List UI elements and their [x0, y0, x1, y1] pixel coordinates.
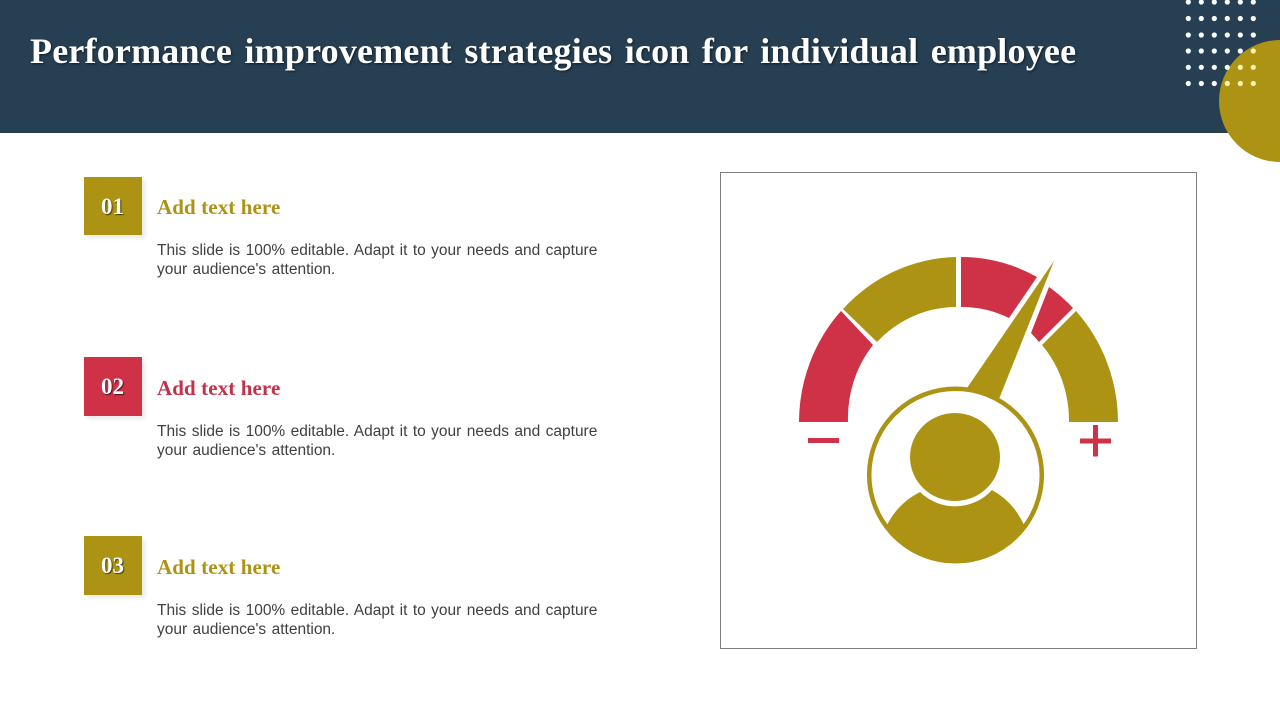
employee head: [910, 413, 1000, 501]
number badge 01: [84, 177, 142, 235]
item 01: [84, 177, 597, 278]
item 03: [84, 536, 597, 638]
gauge: right gold segment: [1042, 311, 1118, 422]
gauge: upper right red segment: [961, 257, 1037, 318]
number badge 03: [84, 536, 142, 595]
item 03 text: [157, 602, 597, 638]
gauge: small red segment: [1031, 287, 1073, 342]
decorative circle and dots: [1186, 0, 1280, 162]
gauge: left red segment: [799, 311, 873, 422]
number badge 03: 03: [101, 553, 124, 578]
item 02 heading: Add text here: [157, 376, 280, 400]
employee body: [887, 490, 1024, 559]
employee ring: [869, 389, 1042, 561]
icon: performance gauge with employee: [799, 257, 1118, 564]
number badge 01: 01: [101, 194, 124, 219]
item 02 text: [157, 423, 597, 459]
item 03 text: This slide is 100% editable. Adapt it to your needs and capture: [157, 602, 597, 619]
item 01 text: your audience's attention.: [157, 261, 335, 278]
item 02 text: your audience's attention.: [157, 442, 335, 459]
number badge 02: 02: [101, 374, 124, 399]
item 02: [84, 357, 597, 459]
item 03 heading: Add text here: [157, 555, 280, 579]
item 01 text: [157, 242, 597, 278]
gauge needle: [967, 261, 1054, 399]
item 02 text: This slide is 100% editable. Adapt it to your needs and capture: [157, 423, 597, 440]
item 03 text: your audience's attention.: [157, 621, 335, 638]
plus sign: [1080, 425, 1111, 456]
title: Performance improvement strategies icon for individual employee: [30, 31, 1076, 71]
item 01 text: This slide is 100% editable. Adapt it to your needs and capture: [157, 242, 597, 259]
gauge: upper left gold segment: [843, 257, 956, 342]
number badge 02: [84, 357, 142, 416]
panel: gauge frame: [720, 172, 1197, 649]
minus sign: [808, 438, 839, 443]
item 01 heading: Add text here: [157, 195, 280, 219]
header banner: [0, 0, 1280, 133]
